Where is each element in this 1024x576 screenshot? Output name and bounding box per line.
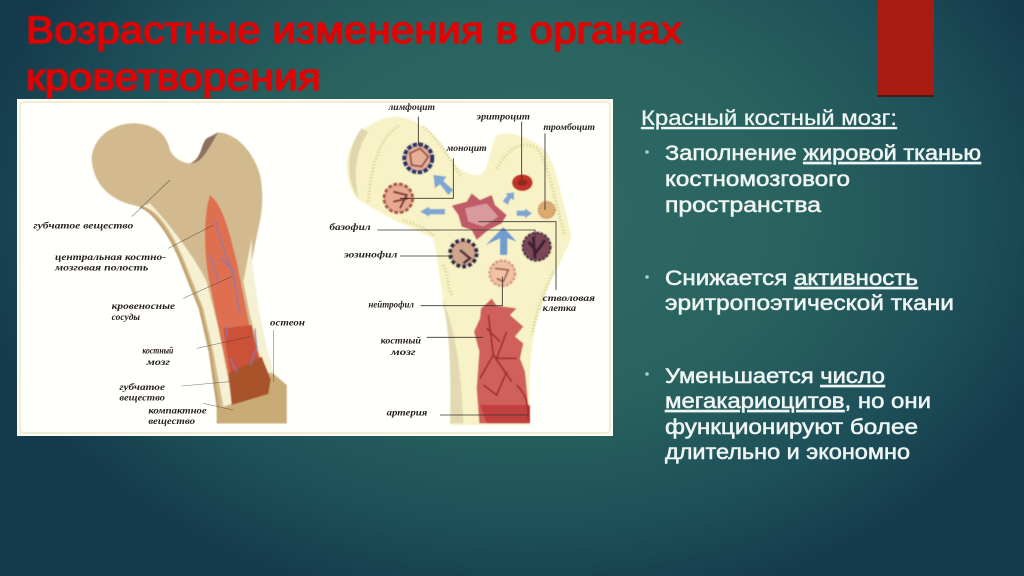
- femur labels: кровеносные: [112, 301, 175, 311]
- bullet point: erythropoietic activity: эритропоэтической ткани: [665, 292, 954, 315]
- bullet point: erythropoietic activity: [645, 267, 954, 315]
- bullet point: megakaryocytes: функционируют более: [665, 416, 918, 439]
- bullet point: fat tissue: Заполнение жировой тканью: [665, 142, 981, 165]
- bullet point: megakaryocytes: [645, 365, 931, 464]
- heading: red bone marrow: Красный костный мозг:: [641, 107, 897, 130]
- cell labels: мозг: [390, 347, 417, 357]
- cell labels: моноцит: [446, 143, 487, 153]
- femur labels: вещество: [148, 416, 196, 426]
- bullet point: fat tissue: пространства: [665, 194, 821, 217]
- cell labels: артерия: [387, 408, 428, 418]
- femur labels: костный: [142, 345, 173, 355]
- illustration panel: [17, 99, 613, 436]
- title: Возрастные изменения в органах: [26, 10, 682, 52]
- diagram: femur cross-section: [33, 123, 305, 426]
- bullet point: fat tissue: [645, 142, 981, 217]
- cell labels: клетка: [543, 303, 577, 313]
- femur labels: мозг: [145, 357, 171, 367]
- cells: [404, 144, 432, 172]
- cell labels: нейтрофил: [368, 299, 414, 309]
- title: кроветворения: [26, 57, 321, 99]
- femur labels: центральная костно-: [55, 252, 166, 262]
- femur labels: [33, 220, 305, 426]
- femur labels: вещество: [119, 393, 166, 403]
- cell labels: эритроцит: [476, 111, 530, 121]
- femur labels: губчатое: [119, 382, 165, 392]
- cell labels: эозинофил: [343, 250, 398, 260]
- leader lines: [132, 180, 273, 410]
- diagram: blood cell formation in bone: [329, 102, 595, 425]
- title: [26, 10, 682, 99]
- femur labels: компактное: [148, 405, 207, 415]
- femur labels: остеон: [270, 318, 305, 328]
- cell labels: лимфоцит: [387, 102, 435, 112]
- leader lines: [377, 117, 556, 415]
- bullet point: fat tissue: костномозгового: [665, 168, 850, 191]
- femur labels: губчатое вещество: [33, 220, 134, 230]
- bullet point: erythropoietic activity: Снижается активность: [665, 267, 918, 290]
- bullet point: megakaryocytes: мегакариоцитов , но они: [665, 390, 931, 413]
- cell labels: стволовая: [543, 293, 595, 303]
- femur labels: мозговая полость: [54, 263, 148, 273]
- cell labels: базофил: [329, 222, 371, 232]
- arrows: [420, 175, 532, 255]
- cell labels: тромбоцит: [543, 122, 595, 132]
- bullet point: megakaryocytes: длительно и экономно: [665, 441, 910, 464]
- decorative red tab: [877, 0, 934, 97]
- cell labels: [329, 102, 595, 418]
- cell labels: костный: [381, 335, 421, 345]
- femur labels: сосуды: [112, 312, 140, 322]
- bullet point: megakaryocytes: Уменьшается число: [665, 365, 885, 388]
